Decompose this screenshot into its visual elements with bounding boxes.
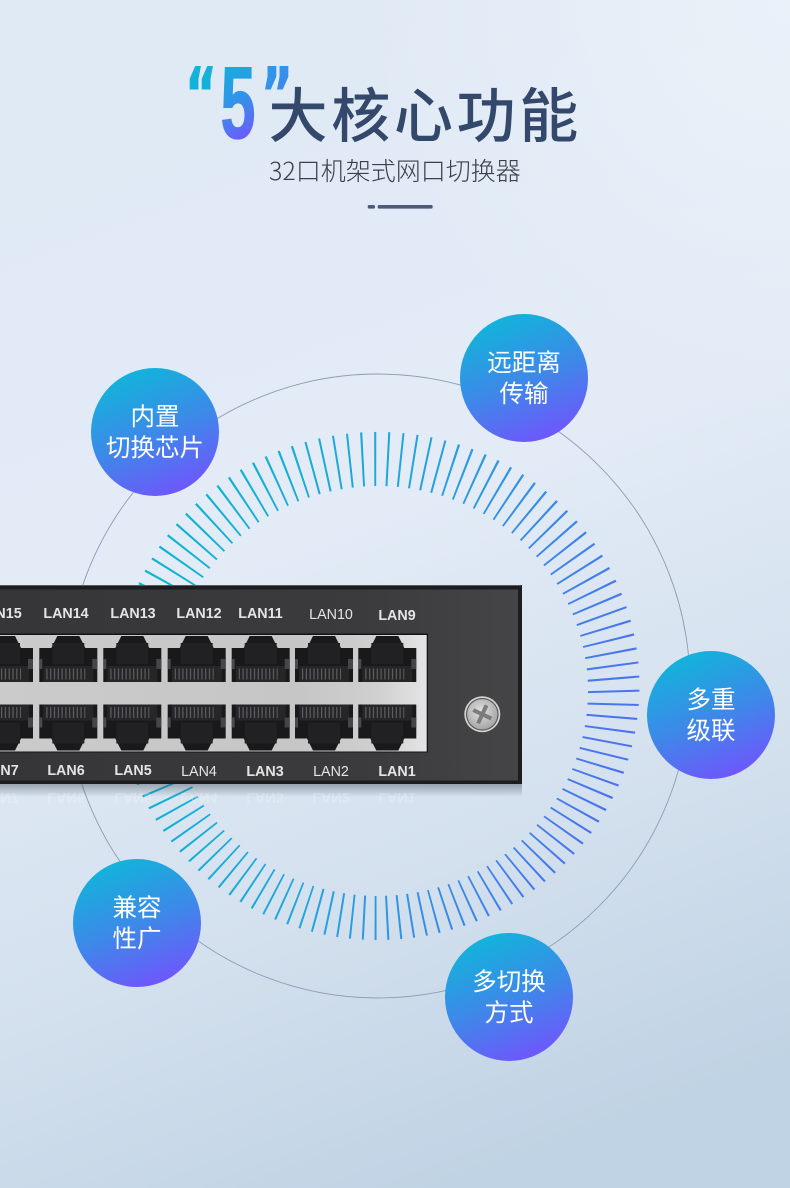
switch shadow and reflected labels: LAN5 xyxy=(114,789,152,805)
big number 5: 5 xyxy=(220,46,256,160)
feature bubble: built-in switching chip: 切换芯片 xyxy=(106,429,204,464)
port labels bottom row: LAN1 xyxy=(378,764,416,780)
switch shadow and reflected labels: LAN4 xyxy=(180,789,218,805)
feature bubble: wide compatibility xyxy=(73,859,201,987)
mounting screw xyxy=(464,696,500,732)
port labels bottom row xyxy=(0,763,416,780)
switch shadow and reflected labels: LAN3 xyxy=(246,789,284,805)
title divider xyxy=(368,205,433,209)
port labels bottom row: LAN5 xyxy=(114,763,152,779)
feature bubble: multiple switching modes: 方式 xyxy=(484,994,534,1029)
port labels bottom row: LAN2 xyxy=(313,764,349,780)
feature bubble: built-in switching chip: 内置 xyxy=(130,398,180,433)
switch shadow and reflected labels xyxy=(0,783,522,805)
thin orbit circle xyxy=(66,374,690,998)
feature bubble: multiple switching modes xyxy=(445,933,573,1061)
RJ45 ports bottom row xyxy=(0,704,416,750)
port labels top row: LAN9 xyxy=(378,608,416,624)
switch shadow and reflected labels: LAN1 xyxy=(378,789,416,805)
feature bubble: built-in switching chip xyxy=(91,368,219,496)
port labels top row: LAN12 xyxy=(176,606,222,622)
switch shadow and reflected labels: LAN6 xyxy=(47,789,85,805)
feature bubble: wide compatibility: 兼容 xyxy=(112,889,162,924)
port labels top row: LAN10 xyxy=(309,607,353,623)
opening quote mark: “ xyxy=(185,52,217,136)
feature bubble: long distance transmission xyxy=(460,314,588,442)
heading text: 大核心功能 xyxy=(268,69,582,154)
port labels top row: LAN11 xyxy=(238,606,283,622)
closing quote mark: ” xyxy=(261,52,293,136)
port labels bottom row: LAN6 xyxy=(47,763,85,779)
feature bubble: long distance transmission: 传输 xyxy=(500,375,548,410)
port labels bottom row: LAN4 xyxy=(181,764,217,780)
feature bubble: multi-level cascade xyxy=(647,651,775,779)
port labels top row: LAN14 xyxy=(43,606,89,622)
feature bubble: long distance transmission: 远距离 xyxy=(487,344,561,379)
feature bubble: multi-level cascade: 多重 xyxy=(686,681,736,716)
port bay xyxy=(0,634,428,752)
port labels top row xyxy=(0,606,416,624)
radial tick ring xyxy=(140,463,610,933)
rack switch front panel xyxy=(0,585,522,784)
port labels top row: LAN13 xyxy=(110,606,156,622)
feature bubble: multiple switching modes: 多切换 xyxy=(472,963,546,998)
title: 5 core functions xyxy=(185,46,582,160)
feature bubble: wide compatibility: 性广 xyxy=(112,920,162,955)
switch shadow and reflected labels: LAN2 xyxy=(312,789,350,805)
RJ45 ports top row xyxy=(0,636,416,682)
subtitle: 32口机架式网口切换器 xyxy=(269,152,521,188)
feature bubble: multi-level cascade: 级联 xyxy=(686,712,736,747)
port labels bottom row: LAN3 xyxy=(246,764,284,780)
